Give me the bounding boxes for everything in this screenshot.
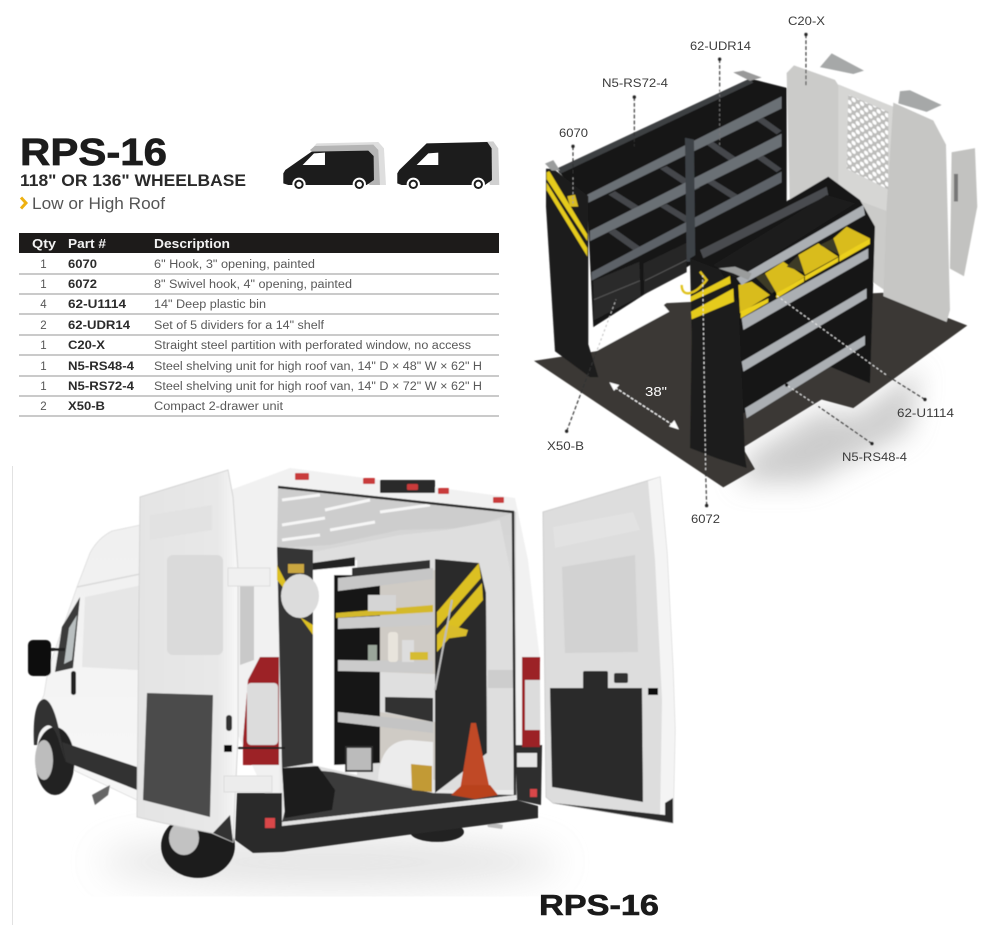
diagram callout labels: C20-X <box>788 14 825 28</box>
rear body frame <box>225 468 541 825</box>
row: N5-RS48-4 <box>40 361 482 373</box>
row: N5-RS48-4: N5-RS48-4 <box>68 361 135 373</box>
row: 6072: 8" Swivel hook, 4" opening, painted <box>154 279 352 291</box>
row: 6072: 1 <box>40 279 47 291</box>
row: 62-UDR14: Set of 5 dividers for a 14" shelf <box>154 320 325 332</box>
row: 62-U1114: 14" Deep plastic bin <box>154 299 266 311</box>
row: 62-UDR14 <box>40 320 325 332</box>
bumper <box>235 745 542 853</box>
tail lights <box>225 657 540 765</box>
icon: low roof van silhouette <box>283 142 386 191</box>
left rear door <box>137 470 272 842</box>
heading: model number and wheelbase <box>20 132 246 213</box>
row: C20-X <box>40 340 471 352</box>
diagram callout labels: 62-UDR14 <box>690 39 751 53</box>
van illustration <box>28 468 675 888</box>
row: N5-RS72-4: Steel shelving unit for high roof van, 14" D × 72" W × 62" H <box>154 381 482 393</box>
van side body <box>28 524 145 805</box>
row: 62-U1114 <box>40 299 266 311</box>
shelving inside van <box>334 560 435 792</box>
row: C20-X: Straight steel partition with perforated window, no access <box>154 340 471 352</box>
van floor <box>534 293 967 487</box>
row: X50-B: 2 <box>40 401 47 413</box>
rear wheel <box>161 814 503 878</box>
row: X50-B <box>40 401 284 413</box>
cargo interior <box>277 487 517 823</box>
diagram callout labels: 62-U1114 <box>897 406 954 420</box>
row: 6070 <box>40 259 315 271</box>
table header labels <box>32 237 230 251</box>
diagram callout labels: N5-RS72-4 <box>602 76 668 90</box>
aisle width label: 38" <box>645 384 667 399</box>
roof marker lights <box>295 473 504 503</box>
icon: yellow chevron <box>21 198 26 208</box>
diagram callout labels: 6072 <box>691 512 720 526</box>
row: 62-U1114: 4 <box>40 299 47 311</box>
tool bag <box>282 766 335 818</box>
row: N5-RS72-4: N5-RS72-4 <box>68 381 135 393</box>
table header labels: Description <box>154 237 230 251</box>
row: 62-U1114: 62-U1114 <box>68 299 127 311</box>
row: 6072 <box>40 279 352 291</box>
wheelbase subtitle: 118" OR 136" WHEELBASE <box>20 171 246 190</box>
row: 6070: 6070 <box>68 259 97 271</box>
row: X50-B: X50-B <box>68 401 105 413</box>
front end panel with hooks <box>435 559 487 793</box>
row: N5-RS72-4 <box>40 381 482 393</box>
diagram callout labels <box>547 14 954 526</box>
arrow: 38 inch aisle dimension <box>609 382 679 429</box>
table header bar <box>19 233 499 253</box>
exploded shelving diagram <box>534 33 977 507</box>
diagram callout labels: 6070 <box>559 126 588 140</box>
leader lines <box>565 33 927 507</box>
steel partition C20-X <box>787 53 977 322</box>
shelving unit N5-RS72-4 <box>545 71 787 377</box>
row: 6070: 1 <box>40 259 47 271</box>
row: N5-RS72-4: 1 <box>40 381 47 393</box>
row: 6070: 6" Hook, 3" opening, painted <box>154 259 315 271</box>
row: 6072: 6072 <box>68 279 97 291</box>
shelving unit N5-RS48-4 <box>682 177 875 468</box>
table header labels: Qty <box>32 237 56 251</box>
parts table <box>19 233 499 416</box>
roof option text: Low or High Roof <box>32 195 165 213</box>
row: N5-RS48-4: 1 <box>40 361 47 373</box>
row: X50-B: Compact 2-drawer unit <box>154 401 284 413</box>
icon: high roof van silhouette <box>397 141 499 191</box>
row: 62-UDR14: 2 <box>40 320 47 332</box>
diagram callout labels: N5-RS48-4 <box>842 450 907 464</box>
row: C20-X: C20-X <box>68 340 105 352</box>
row: N5-RS48-4: Steel shelving unit for high roof van, 14" D × 48" W × 62" H <box>154 361 482 373</box>
left diamond plate panel and hard hat <box>277 547 319 768</box>
row: 62-UDR14: 62-UDR14 <box>68 320 131 332</box>
traffic cone <box>451 723 498 799</box>
bottom model label: RPS-16 <box>539 890 659 922</box>
right rear door <box>543 477 675 823</box>
row: C20-X: 1 <box>40 340 47 352</box>
diagram callout labels: X50-B <box>547 439 584 453</box>
title: RPS-16 <box>20 132 167 174</box>
table header labels: Part # <box>68 237 106 251</box>
